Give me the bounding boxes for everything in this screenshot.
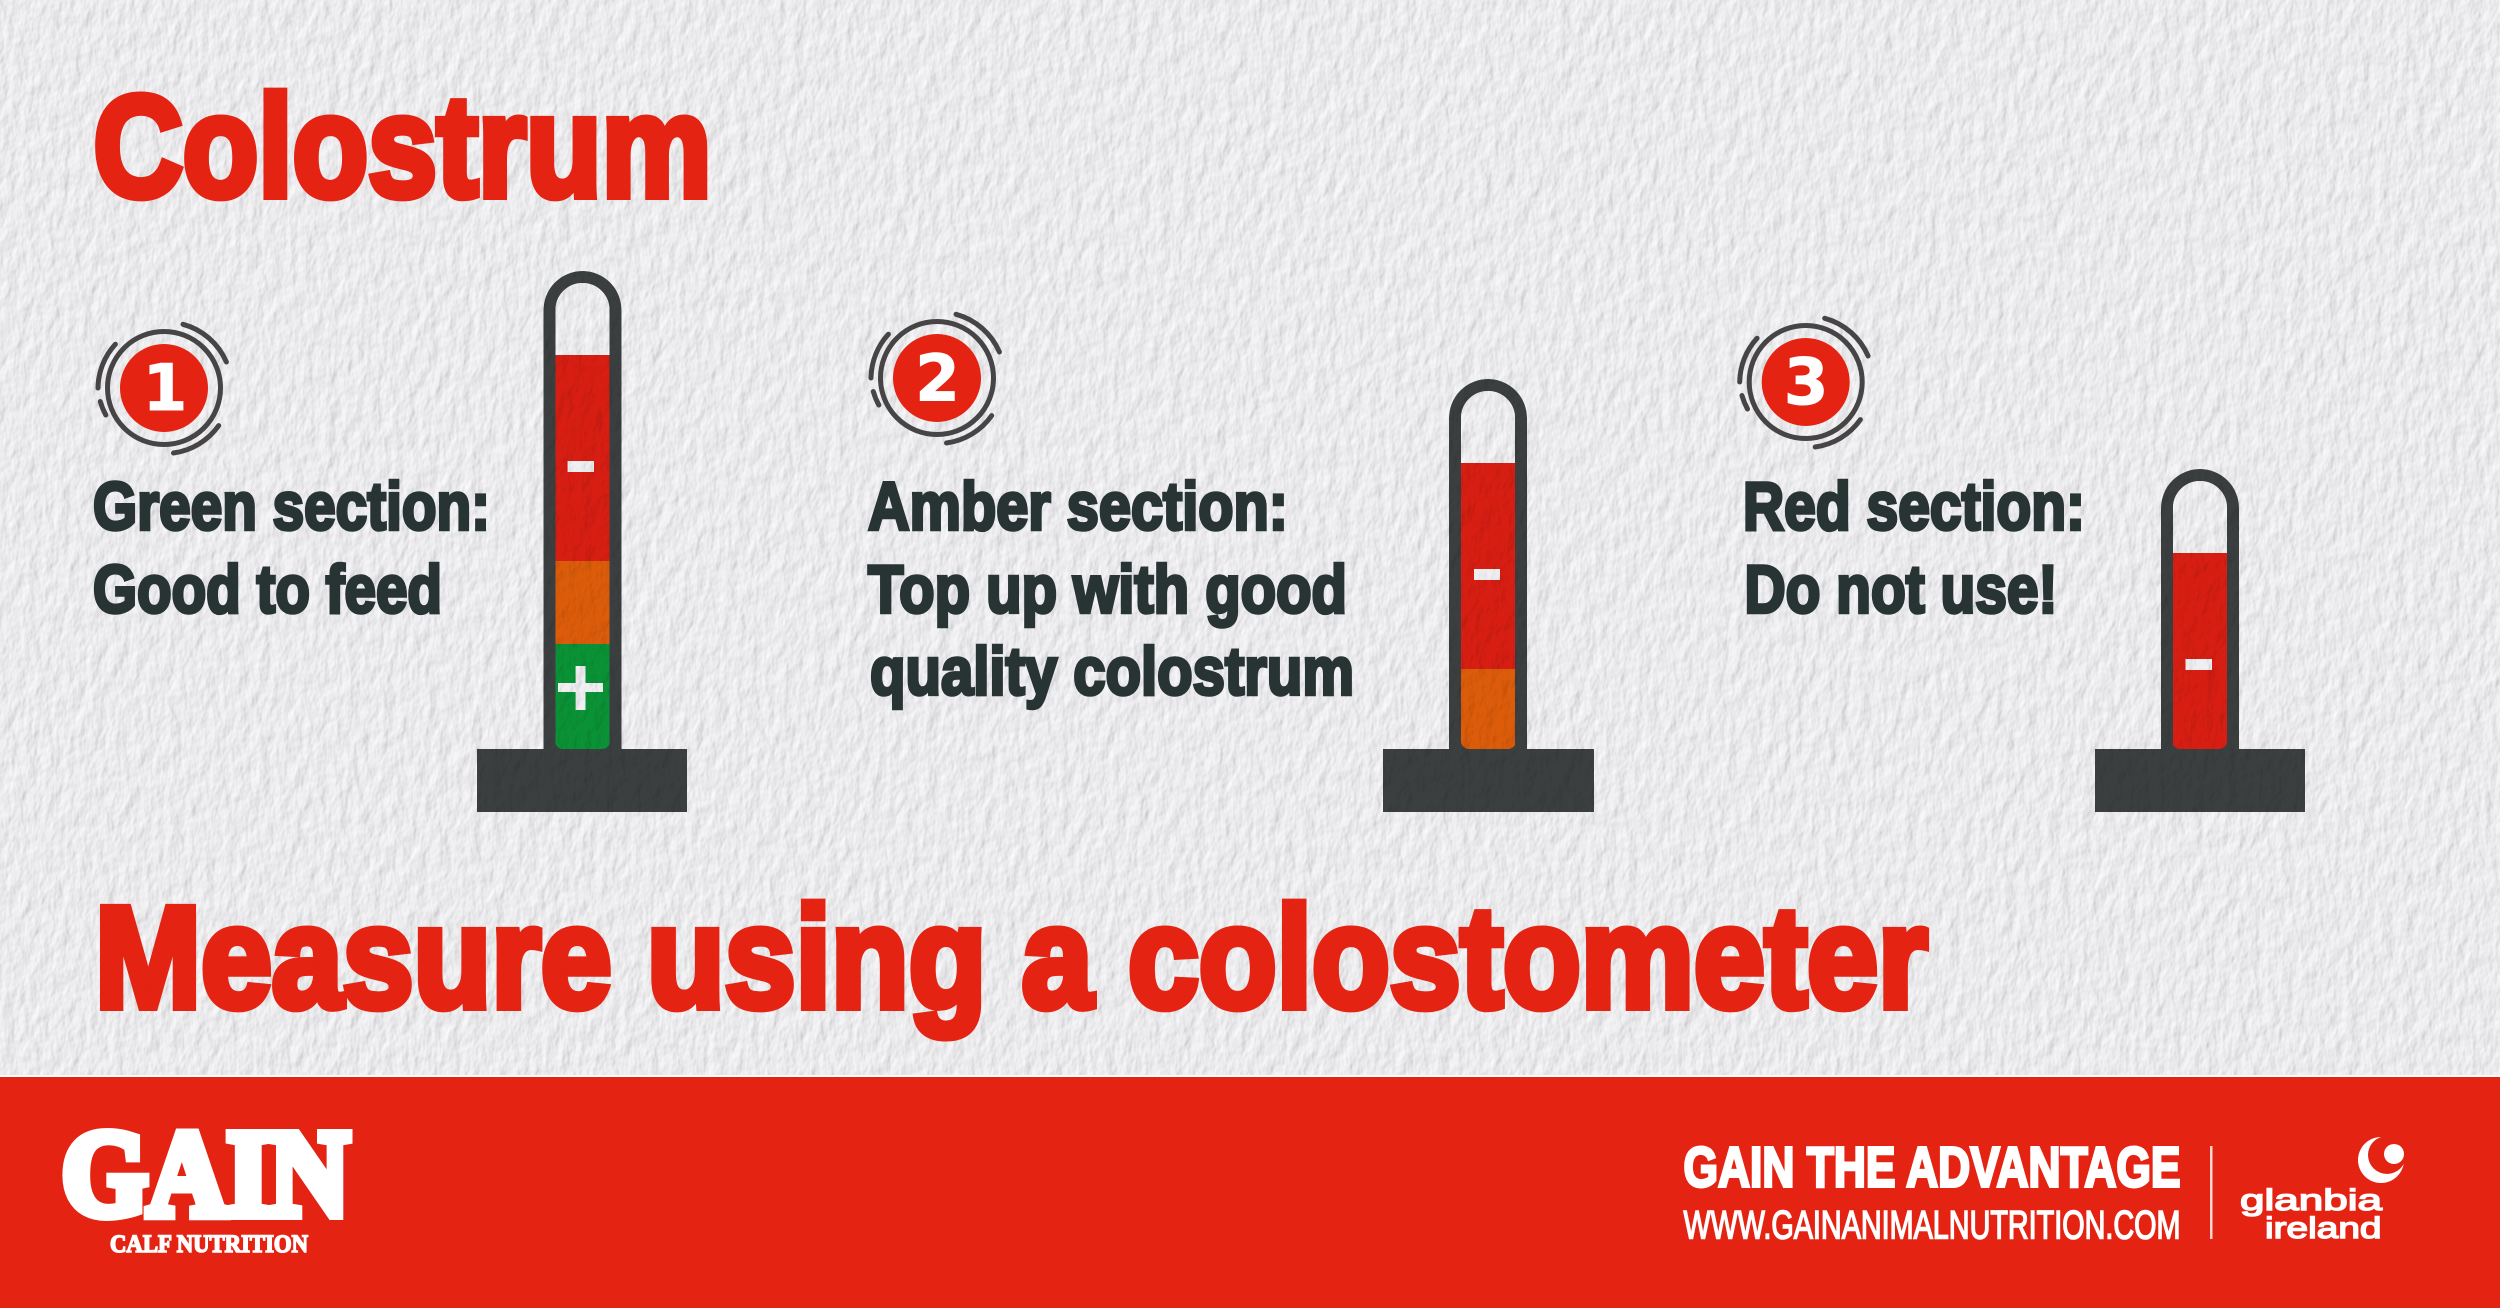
colostometer 1: [477, 277, 687, 812]
number badge 1: 1: [143, 352, 187, 426]
number badge 3: 3: [1784, 346, 1828, 420]
logo: glanbia ireland: glanbia: [2240, 1184, 2382, 1217]
panel: step 2 amber section: [868, 314, 1594, 812]
title: Colostrum: [94, 66, 712, 227]
text: red section: Do not use!: [1744, 552, 2058, 628]
logo: GAIN calf nutrition: GAIN: [62, 1106, 349, 1242]
tagline and website: [1684, 1136, 2180, 1248]
text: green section: Green section:: [93, 468, 490, 544]
panel: step 3 red section: [1740, 318, 2305, 812]
footer band: [0, 1075, 2500, 1308]
text: amber section: Amber section:: [868, 468, 1288, 544]
text: amber section: Top up with good: [868, 552, 1347, 628]
text: amber section: [868, 468, 1354, 710]
tagline and website: WWW.GAINANIMALNUTRITION.COM: [1684, 1204, 2180, 1248]
logo: glanbia ireland: ireland: [2265, 1212, 2382, 1245]
text: red section: [1743, 468, 2085, 628]
colostometer 2: [1383, 385, 1594, 812]
text: red section: Red section:: [1743, 468, 2085, 544]
logo: GAIN calf nutrition: CALF NUTRITION: [110, 1231, 308, 1258]
number badge 3: [1740, 318, 1868, 447]
text: green section: [93, 468, 490, 628]
colostometer 3: [2095, 475, 2305, 812]
number badge 2: [871, 314, 999, 443]
divider: [2210, 1146, 2212, 1239]
number badge 1: [98, 324, 226, 453]
panel: step 1 green section: [93, 277, 687, 812]
tagline and website: GAIN THE ADVANTAGE: [1684, 1136, 2180, 1200]
logo: glanbia ireland: [2240, 1136, 2406, 1245]
number badge 2: 2: [915, 342, 960, 416]
text: amber section: quality colostrum: [870, 634, 1354, 710]
headline: Measure using a colostometer: [95, 877, 1928, 1038]
text: green section: Good to feed: [93, 552, 442, 628]
